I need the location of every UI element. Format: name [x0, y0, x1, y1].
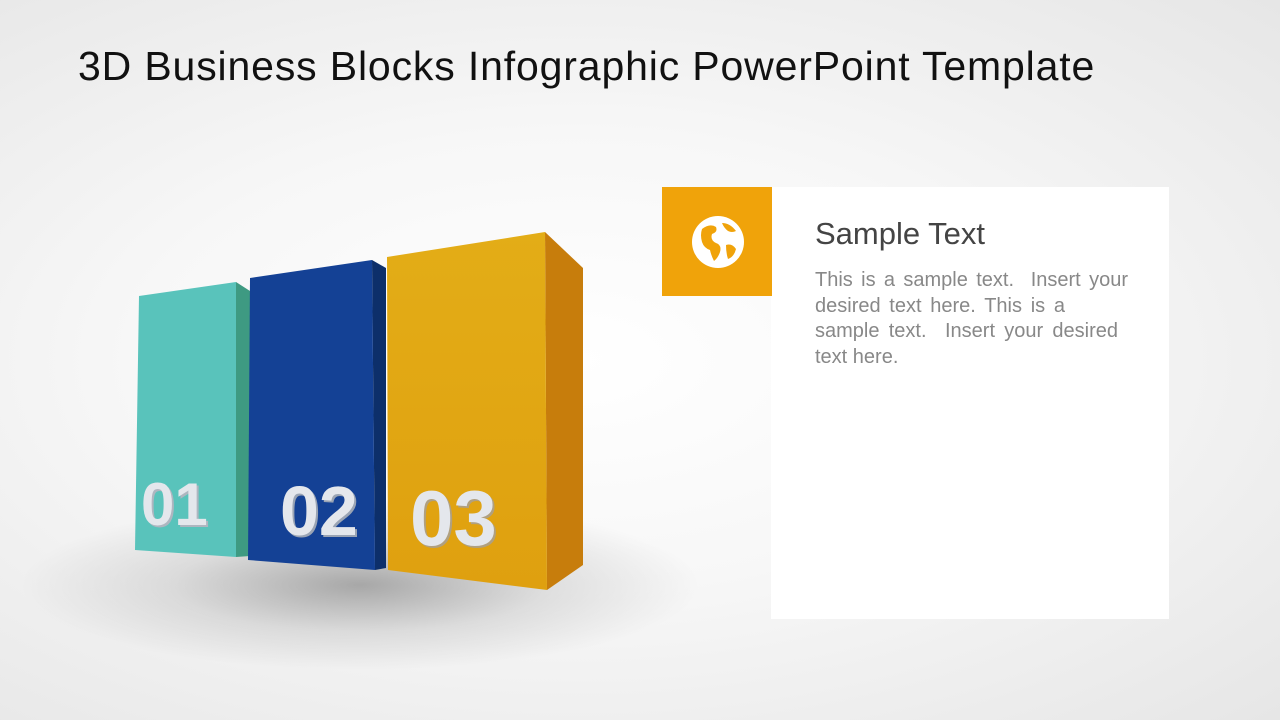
- text block: [815, 269, 1128, 368]
- block 01: 01: [141, 471, 208, 538]
- icon: globe: [662, 187, 772, 296]
- shadow: [20, 500, 700, 670]
- heading: Sample Text: [815, 216, 985, 251]
- block 01: 01: [143, 473, 210, 540]
- block 02: 02: [282, 474, 360, 552]
- block 03: [387, 232, 583, 590]
- text block: sample text. Insert your desired: [815, 320, 1118, 342]
- text block: desired text here. This is a: [815, 294, 1065, 316]
- text block: text here.: [815, 346, 898, 368]
- block 02: [248, 260, 386, 570]
- block 01: [135, 282, 250, 557]
- title: 3D Business Blocks Infographic PowerPoint Template: [78, 43, 1095, 89]
- block 02: 02: [280, 472, 358, 550]
- block 03: 03: [410, 474, 497, 562]
- panel: text card: [771, 187, 1169, 619]
- block 03: 03: [412, 476, 499, 564]
- text block: This is a sample text. Insert your: [815, 269, 1128, 291]
